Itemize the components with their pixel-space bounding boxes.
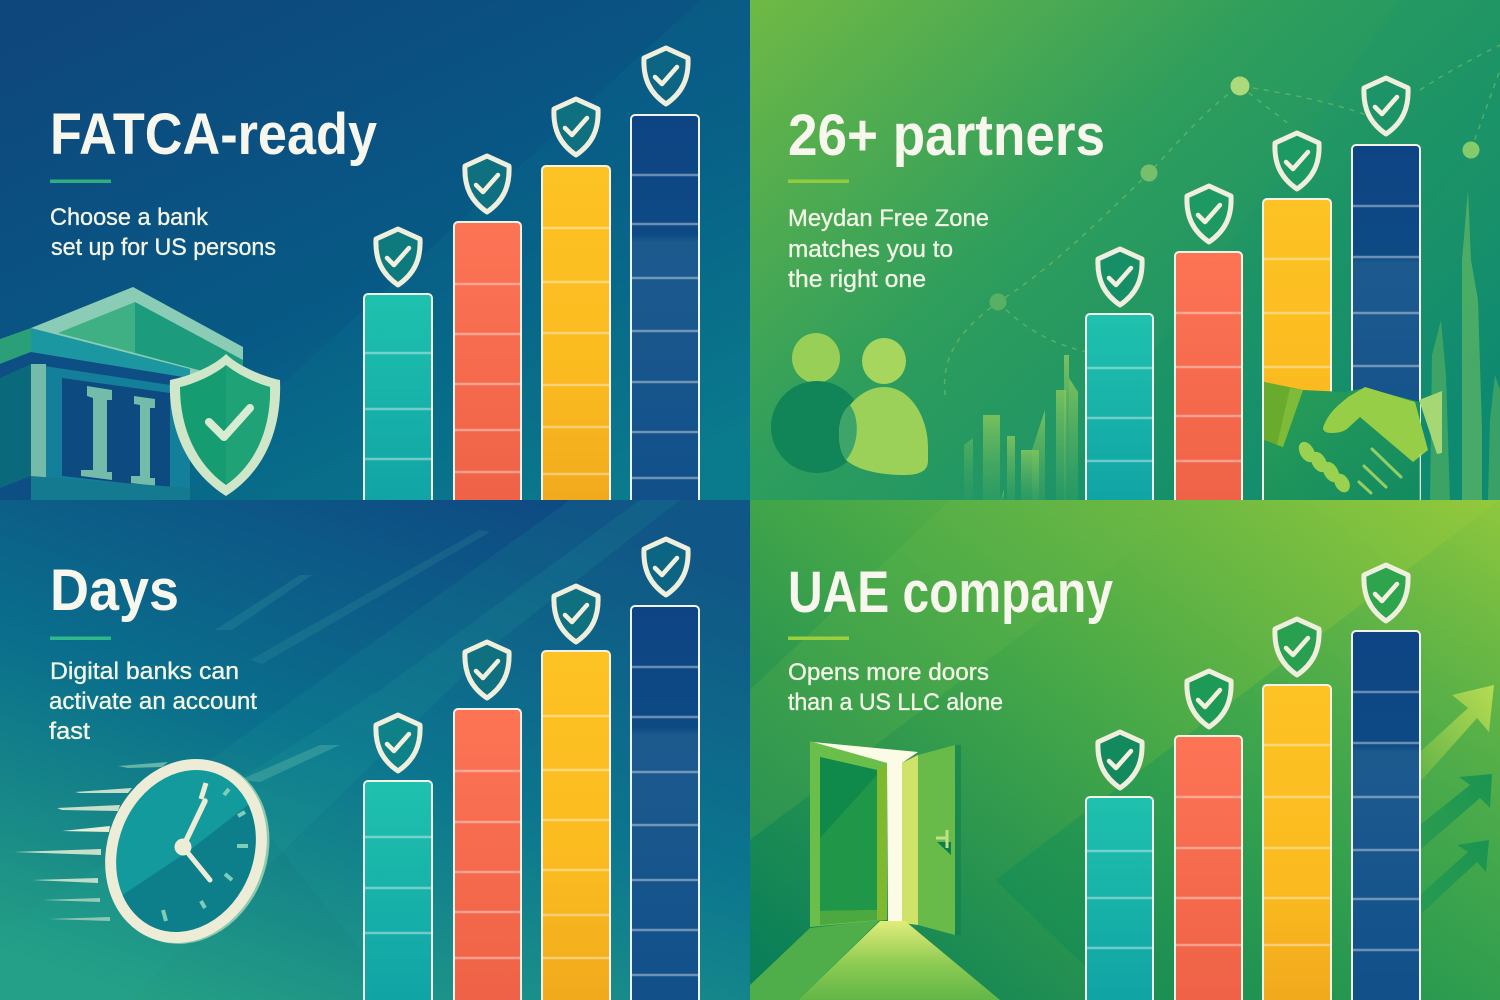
- network dots and dashed links: [945, 45, 1500, 395]
- icon: handshake: [1262, 382, 1442, 500]
- heading: FATCA-ready: FATCA-ready: [50, 102, 377, 167]
- text: Meydan Free Zone: matches you to: [788, 236, 953, 263]
- text: choose a bank: [50, 204, 276, 261]
- bar chart: [364, 115, 699, 514]
- bar chart: [364, 606, 699, 1000]
- text: opens more doors: than a US LLC alone: [788, 689, 1003, 716]
- panel: UAE company: [750, 500, 1500, 1000]
- illustration: open door: [750, 741, 1000, 1000]
- text: opens more doors: Opens more doors: [788, 659, 989, 686]
- icon: bank building: [0, 287, 243, 500]
- text: opens more doors: [788, 662, 1002, 710]
- illustration: Burj skyline: [1430, 190, 1500, 500]
- icons: bar shields: [376, 48, 688, 285]
- icon: clock: [105, 759, 270, 944]
- accent rule: [788, 636, 849, 640]
- icons: growth arrows: [1420, 685, 1494, 915]
- heading: Days: Days: [50, 558, 179, 623]
- illustration: skyline: [964, 355, 1078, 500]
- text: digital banks: Digital banks can: [50, 658, 239, 685]
- heading: 26+ partners: 26+ partners: [788, 103, 1105, 168]
- accent rule: [50, 180, 111, 183]
- text: Meydan Free Zone: [788, 205, 989, 293]
- icons: bar shields: [1098, 565, 1408, 788]
- text: Meydan Free Zone: the right one: [788, 266, 926, 293]
- panel: FATCA-ready: [0, 0, 750, 514]
- icon: two people: [771, 333, 928, 475]
- text: digital banks: fast: [49, 718, 90, 745]
- panel: 26+ partners: [750, 0, 1500, 514]
- text: Meydan Free Zone: Meydan Free Zone: [788, 205, 989, 232]
- text: choose a bank: Choose a bank: [50, 204, 209, 231]
- icon: large shield with check: [170, 354, 280, 496]
- text: choose a bank: set up for US persons: [51, 234, 276, 261]
- accent rule: [50, 636, 111, 640]
- bar chart: [1086, 631, 1420, 1000]
- text: digital banks: activate an account: [49, 688, 257, 715]
- text: digital banks: [49, 658, 257, 745]
- accent rule: [788, 180, 849, 183]
- panel: Days: [0, 500, 750, 1000]
- icons: bar shields: [376, 539, 688, 771]
- bar chart: [1086, 145, 1420, 514]
- icons: bar shields: [1098, 78, 1408, 305]
- icon: speed lines: [14, 762, 168, 921]
- heading: UAE company: UAE company: [788, 560, 1113, 625]
